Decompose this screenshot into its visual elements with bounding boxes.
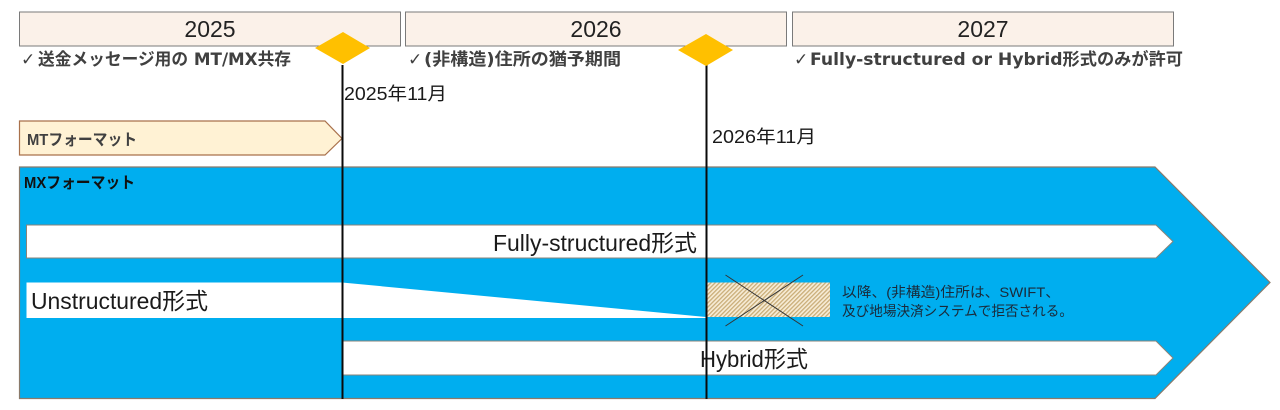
year header: 2026: 2026: [570, 16, 622, 42]
year header: 2027: [792, 12, 1174, 46]
bar: Hybrid format: Hybrid形式: [700, 346, 808, 372]
year header: 2025: 2025: [184, 16, 236, 42]
date label: November 2025: 2025年11月: [344, 84, 447, 104]
year header: 2026: [406, 12, 786, 46]
note: 2026 grace period: ✓: [408, 50, 422, 70]
note: 2027 allowed formats: Fully-structured or Hybrid形式のみが許可: [810, 49, 1183, 70]
date label: November 2026: 2026年11月: [712, 127, 816, 147]
note: 2025 coexistence: 送金メッセージ用の MT/MX共存: [38, 49, 291, 70]
tapering bar: Unstructured format: [26, 282, 706, 318]
note: 2026 grace period: (非構造)住所の猶予期間: [424, 50, 621, 70]
note: 2025 coexistence: ✓: [21, 50, 35, 70]
milestone line: November 2025: [342, 65, 344, 399]
milestone line: November 2026: [706, 65, 708, 399]
arrow panel: MX format: MXフォーマット: [24, 175, 135, 192]
note: 2027 allowed formats: ✓: [794, 50, 808, 70]
year header: 2025: [20, 12, 400, 46]
note: rejection explanation: [842, 284, 1073, 319]
rejected block: hatched area with cross: [707, 275, 830, 326]
tapering bar: Unstructured format: Unstructured形式: [31, 288, 208, 314]
note: rejection explanation: 以降、(非構造)住所は、SWIFT、: [842, 284, 1060, 300]
milestone diamond: November 2026: [678, 34, 733, 66]
arrow: MT format: MTフォーマット: [27, 132, 137, 149]
year header: 2027: 2027: [957, 16, 1009, 42]
note: rejection explanation: 及び地場決済システムで拒否される。: [842, 303, 1073, 319]
arrow: MT format: [20, 121, 342, 155]
bar: Fully-structured format: [26, 225, 1173, 258]
milestone diamond: November 2025: [315, 32, 370, 64]
bar: Fully-structured format: Fully-structured形式: [493, 230, 697, 256]
bar: Hybrid format: [342, 341, 1173, 375]
